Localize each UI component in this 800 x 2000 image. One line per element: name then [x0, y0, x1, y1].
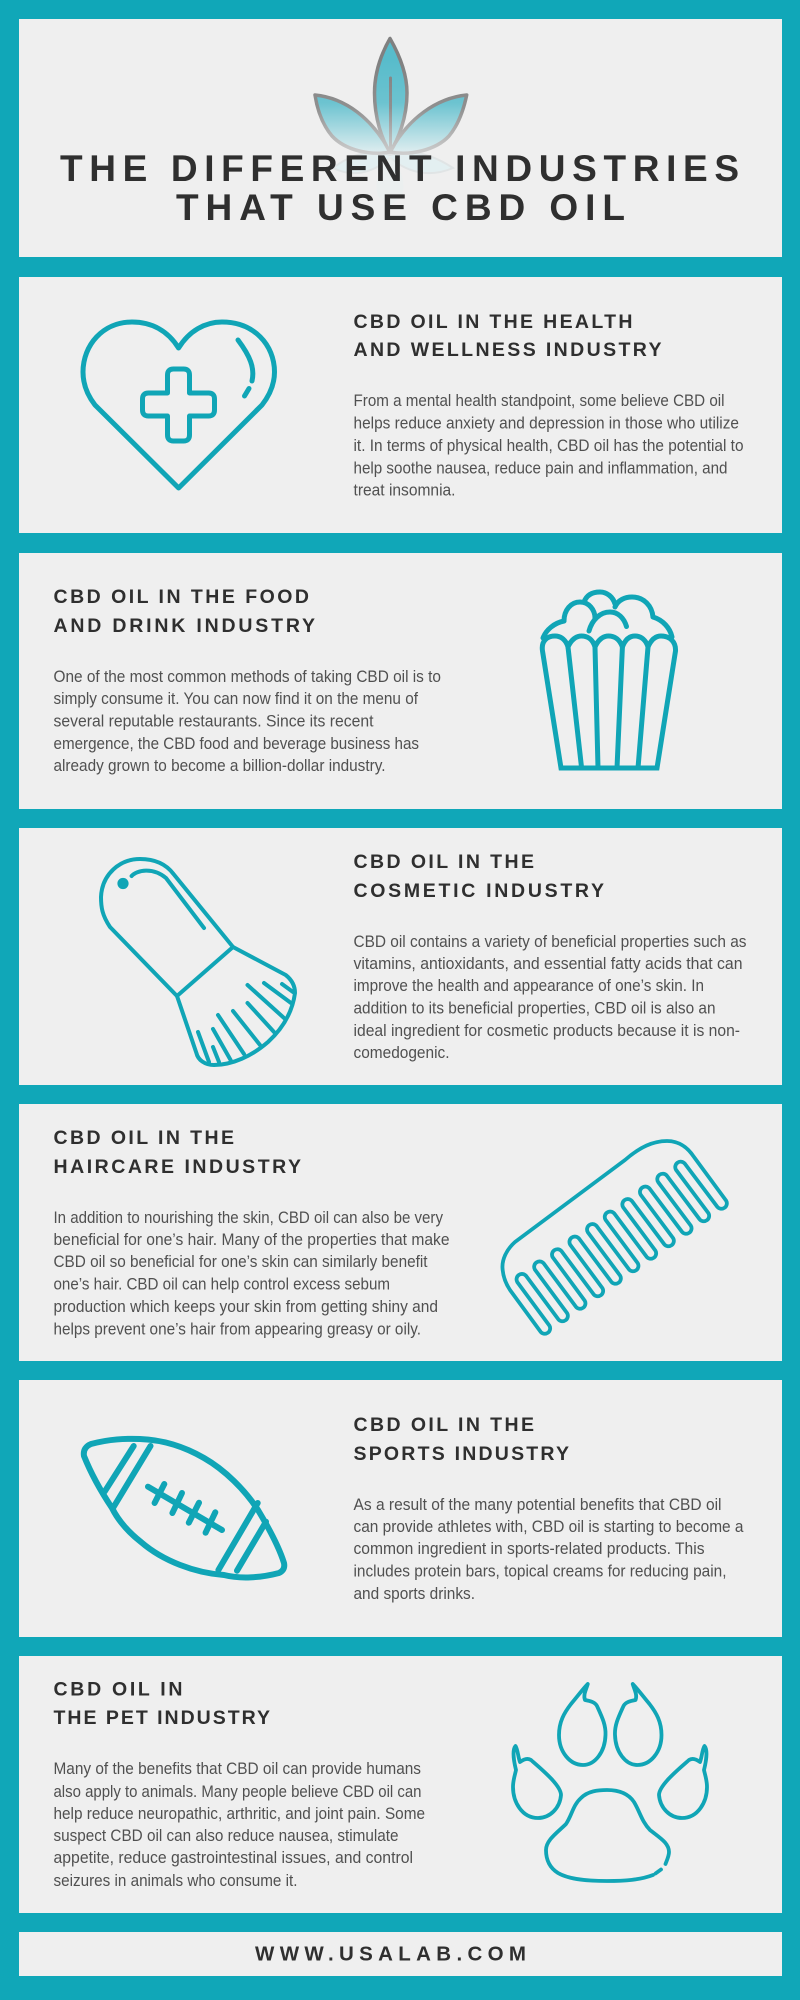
panel: health and wellness [19, 277, 782, 533]
text: food: emergence, the CBD food and beverage business has [54, 734, 419, 753]
panel: pet [19, 1656, 782, 1913]
text: health [354, 391, 744, 499]
heading: health: AND WELLNESS INDUSTRY [354, 339, 662, 361]
text: health: From a mental health standpoint, some believe CBD oil [354, 391, 724, 410]
text: cosmetic: vitamins, antioxidants, and essential fatty acids that can [354, 954, 742, 973]
text: sports: common ingredient in sports-related products. This [354, 1539, 704, 1558]
heading: haircare [54, 1127, 301, 1178]
text: pet: Many of the benefits that CBD oil can provide humans [54, 1759, 421, 1778]
panel: title [19, 19, 782, 257]
panel: haircare [19, 1104, 782, 1361]
text: sports: and sports drinks. [354, 1584, 475, 1603]
icon: heart with cross [83, 322, 274, 488]
text: health: help soothe nausea, reduce pain and inflammation, and [354, 458, 728, 477]
panel: footer [19, 1932, 782, 1976]
heading: cosmetic: CBD OIL IN THE [354, 851, 534, 873]
heading: food: AND DRINK INDUSTRY [54, 615, 315, 637]
text: pet: help reduce neuropathic, arthritic, and joint pain. Some [54, 1804, 425, 1823]
heading: food: CBD OIL IN THE FOOD [54, 586, 309, 608]
text: haircare: production which keeps your skin from getting shiny and [54, 1297, 438, 1316]
text: haircare: beneficial for one’s hair. Many of the properties that make [54, 1230, 450, 1249]
title [60, 148, 739, 228]
text: sports: can provide athletes with, CBD oil is starting to become a [354, 1517, 744, 1536]
text: food: already grown to become a billion-dollar industry. [54, 756, 386, 775]
text: haircare [54, 1208, 450, 1338]
icon: football [84, 1439, 284, 1577]
icon: comb [502, 1141, 727, 1334]
icon: popcorn [542, 592, 676, 768]
heading: sports: SPORTS INDUSTRY [354, 1443, 569, 1465]
text: pet: suspect CBD oil can also reduce nausea, stimulate [54, 1826, 398, 1845]
text: cosmetic: CBD oil contains a variety of beneficial properties such as [354, 932, 746, 951]
heading: haircare: HAIRCARE INDUSTRY [54, 1156, 301, 1178]
panel: sports [19, 1380, 782, 1637]
text: health: it. In terms of physical health, CBD oil has the potential to [354, 436, 744, 455]
text: pet: seizures in animals who consume it. [54, 1871, 298, 1890]
heading: pet [54, 1679, 270, 1729]
text: food: One of the most common methods of taking CBD oil is to [54, 667, 441, 686]
text: health: helps reduce anxiety and depression in those who utilize [354, 413, 739, 432]
heading: sports [354, 1414, 569, 1465]
text: sports: As a result of the many potential benefits that CBD oil [354, 1495, 722, 1514]
heading: cosmetic: COSMETIC INDUSTRY [354, 880, 604, 902]
heading: health: CBD OIL IN THE HEALTH [354, 311, 632, 333]
text: cosmetic: addition to its beneficial properties, CBD oil is also an [354, 999, 716, 1018]
icon: paw print [513, 1684, 707, 1881]
text: haircare: one’s hair. CBD oil can help control excess sebum [54, 1274, 390, 1293]
panel: food and drink [19, 553, 782, 809]
panel: cosmetic [19, 828, 782, 1085]
heading: sports: CBD OIL IN THE [354, 1414, 534, 1436]
heading: pet: THE PET INDUSTRY [54, 1707, 270, 1729]
heading: food [54, 586, 315, 637]
footer website: WWW.USALAB.COM [255, 1943, 526, 1966]
text: cosmetic: comedogenic. [354, 1043, 450, 1062]
text: haircare: helps prevent one’s hair from appearing greasy or oily. [54, 1319, 421, 1338]
heading: cosmetic [354, 851, 604, 902]
heading: haircare: CBD OIL IN THE [54, 1127, 234, 1149]
text: health: treat insomnia. [354, 480, 456, 499]
text: food: simply consume it. You can now find it on the menu of [54, 689, 418, 708]
heading: health [354, 311, 662, 361]
icon: makeup brush [101, 859, 295, 1065]
text: sports: includes protein bars, topical creams for reducing pain, [354, 1561, 726, 1580]
text: food: several reputable restaurants. Since its recent [54, 712, 374, 731]
text: pet [54, 1759, 425, 1890]
text: cosmetic [354, 932, 746, 1062]
text: pet: appetite, reduce gastrointestinal issues, and control [54, 1848, 413, 1867]
text: sports [354, 1495, 744, 1603]
text: haircare: CBD oil so beneficial for one’s skin can similarly benefit [54, 1252, 428, 1271]
text: food [54, 667, 441, 775]
title: THAT USE CBD OIL [176, 187, 625, 228]
text: cosmetic: ideal ingredient for cosmetic products because it is non- [354, 1021, 740, 1040]
title: THE DIFFERENT INDUSTRIES [60, 148, 739, 189]
text: pet: also apply to animals. Many people believe CBD oil can [54, 1782, 422, 1801]
heading: pet: CBD OIL IN [54, 1679, 182, 1701]
text: haircare: In addition to nourishing the skin, CBD oil can also be very [54, 1208, 443, 1227]
icon: cannabis leaf logo [315, 38, 467, 206]
text: cosmetic: improve the health and appearance of one’s skin. In [354, 976, 704, 995]
